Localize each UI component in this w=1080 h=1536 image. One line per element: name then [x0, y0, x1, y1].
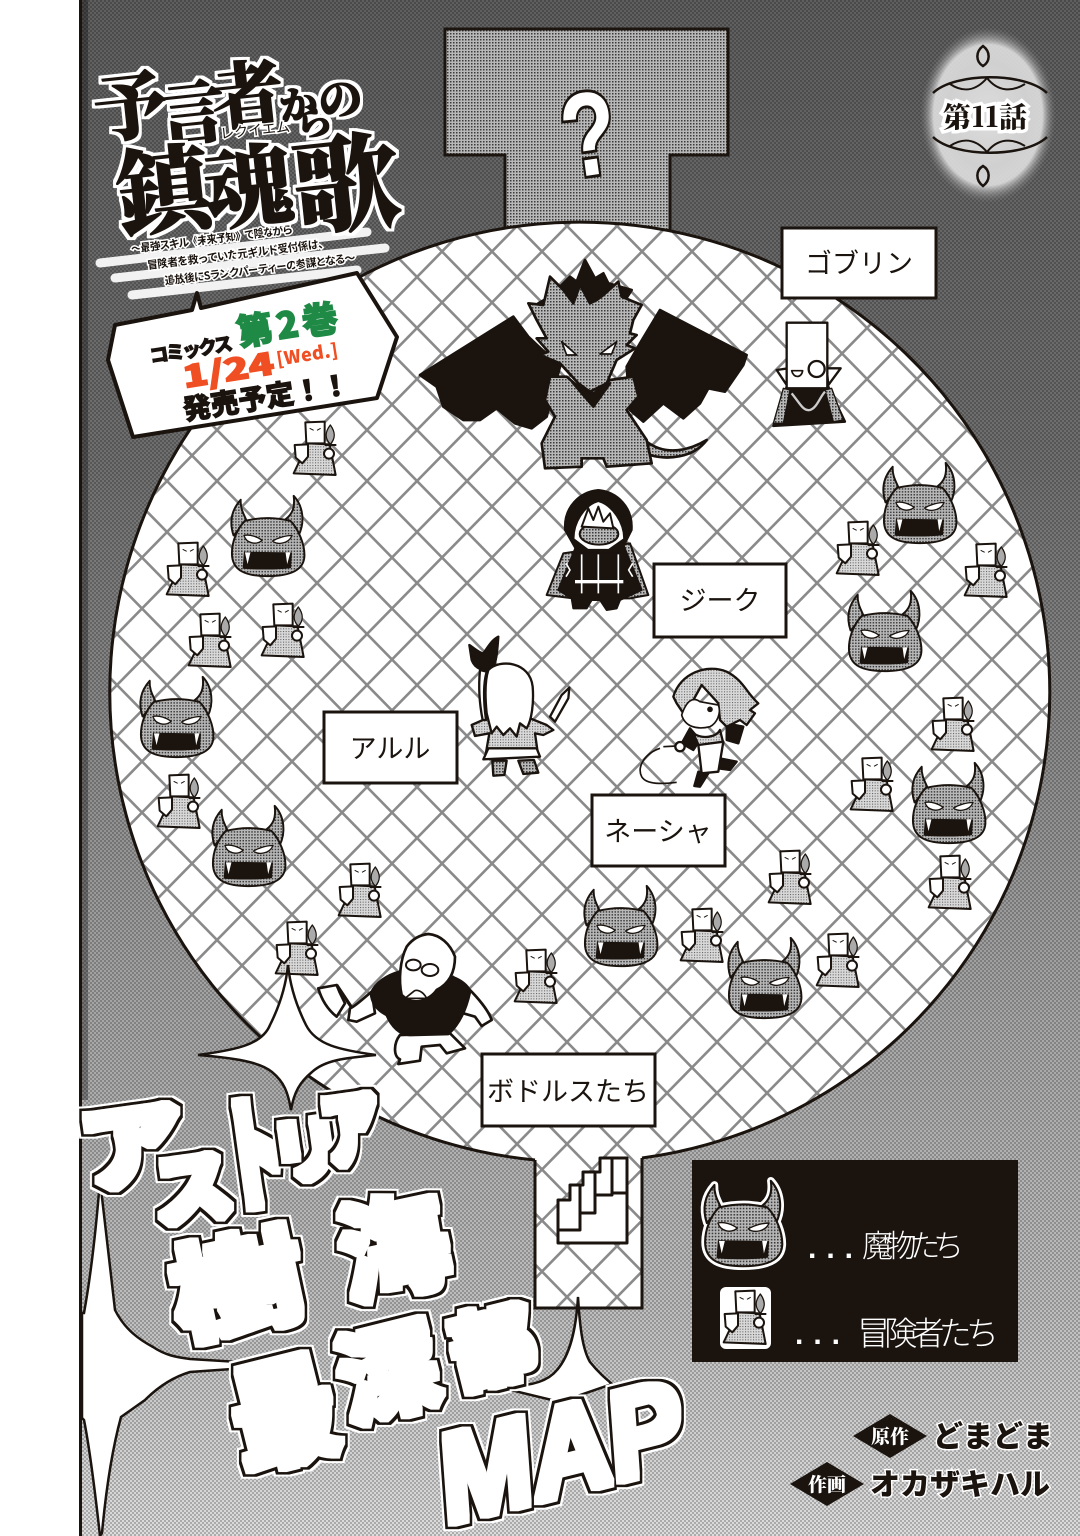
character: Zeke — [547, 490, 648, 610]
Aruru torso — [472, 718, 553, 758]
label: Bodorus party — [482, 1054, 655, 1126]
legend adventurer icon — [720, 1287, 771, 1349]
title row two — [154, 1153, 461, 1368]
callout text: コミックス — [147, 329, 235, 369]
dragon eyes — [562, 342, 617, 355]
title row two: 樹 — [154, 1188, 318, 1368]
goblin eye — [792, 371, 803, 376]
Zeke belt — [575, 580, 623, 583]
dragon body — [542, 377, 652, 468]
logo line one: 者 — [206, 35, 288, 145]
legend adventurer dots: ... — [795, 1318, 850, 1351]
Bodorus left arm — [348, 992, 375, 1022]
label: Aruru — [324, 712, 457, 783]
adventurer 11 — [276, 922, 318, 975]
legend adventurer name: 冒険者たち — [857, 1307, 999, 1355]
T-shaped upper room — [445, 29, 728, 240]
title row two: 海 — [323, 1153, 461, 1329]
logo subtitle bars — [100, 232, 385, 295]
adventurer 12 — [515, 950, 557, 1003]
logo line two: 魂 — [198, 115, 299, 249]
logo ruby text: レクイエム — [219, 118, 291, 142]
legend panel — [692, 1160, 1018, 1362]
adventurers — [158, 422, 1007, 1003]
Nesha whip — [640, 746, 677, 783]
monster 7 — [584, 886, 657, 966]
monster 1 — [231, 496, 304, 576]
dragon left wing — [420, 317, 560, 428]
logo line one: 言 — [152, 58, 230, 162]
badge ornaments — [933, 46, 1047, 186]
logo line one — [88, 35, 365, 162]
title row three — [211, 1273, 547, 1499]
sparkle: MAP — [490, 1297, 612, 1402]
credit: original story — [853, 1412, 1053, 1458]
big title: Astoria Sea of Trees deepest MAP — [70, 1051, 698, 1536]
label: Bodorus party: ボドルスたち — [487, 1077, 649, 1107]
callout: comics volume 2 — [108, 273, 397, 437]
legend monster icon — [704, 1181, 782, 1266]
logo subtitle text: 冒険者を救っていた元ギルド受付係は、 — [146, 235, 330, 273]
logo line two: 鎮 — [109, 111, 223, 256]
goblin collar — [773, 388, 843, 423]
Aruru skirt — [483, 748, 540, 759]
sparkle: top — [198, 965, 376, 1110]
monsters — [140, 463, 985, 1018]
label: Zeke — [654, 564, 786, 637]
logo line two — [109, 97, 407, 259]
character: Bodorus — [318, 934, 492, 1064]
circular dungeon floor with grid — [100, 210, 1060, 1320]
monster 4 — [140, 677, 213, 757]
title row three: 深 — [320, 1284, 452, 1448]
adventurer 1 — [294, 422, 336, 475]
adventurer 15 — [681, 909, 723, 962]
icon: question mark: ? — [553, 66, 625, 204]
badge text: 第11話 — [943, 96, 1027, 136]
dragon head — [528, 277, 642, 392]
label: Zeke: ジーク — [680, 586, 760, 616]
adventurer 13 — [769, 851, 811, 904]
series logo title — [88, 35, 407, 295]
character: goblin — [773, 323, 845, 426]
Zeke hood — [565, 490, 632, 553]
author name: どまどま — [933, 1412, 1053, 1456]
character: Nesha — [640, 669, 758, 787]
character: Aruru — [469, 637, 569, 776]
callout text: 1/24 — [179, 339, 277, 397]
Nesha face — [682, 699, 719, 728]
callout text: [Wed.] — [274, 336, 340, 372]
Nesha boots — [694, 758, 737, 787]
logo subtitle text — [130, 221, 356, 289]
adventurer 7 — [932, 698, 974, 751]
Zeke cape — [547, 543, 648, 598]
credit: artist: 作画 — [808, 1473, 846, 1496]
logo line one: 予 — [88, 45, 172, 159]
logo line two: 歌 — [285, 97, 407, 259]
title row one: リ — [264, 1091, 348, 1201]
Nesha arms — [682, 723, 743, 750]
callout text: 発売予定！！ — [180, 363, 352, 429]
legend monster name: 魔物たち — [862, 1221, 964, 1266]
Zeke hair — [582, 507, 613, 528]
legend monster dots: ... — [808, 1232, 863, 1265]
credit: artist — [790, 1460, 1050, 1506]
Aruru bow — [469, 637, 498, 670]
title row one: ト — [211, 1051, 297, 1241]
callout text — [147, 289, 352, 429]
credit: original story: 原作 — [871, 1425, 909, 1448]
adventurer 14 — [929, 856, 971, 909]
Aruru hair — [486, 664, 533, 737]
logo line one: か — [276, 73, 320, 131]
Aruru hair strand — [479, 670, 487, 720]
Zeke coat trim — [566, 553, 633, 593]
Nesha hair — [673, 669, 758, 727]
Bodorus right arm — [463, 988, 492, 1026]
title row three: 部 — [437, 1273, 547, 1411]
Bodorus glasses — [406, 960, 438, 976]
adventurer 8 — [851, 758, 893, 811]
Zeke lower face — [580, 523, 618, 545]
goblin monocle — [809, 361, 825, 377]
dragon chest mark — [573, 383, 610, 407]
Bodorus mouth — [405, 990, 427, 998]
Nesha eye — [708, 708, 712, 711]
goblin necklace — [792, 392, 825, 410]
label: Aruru: アルル — [350, 734, 430, 764]
title row one: ア — [70, 1067, 192, 1213]
dragon right wing — [627, 310, 747, 422]
dragon crest spikes — [538, 260, 632, 313]
Zeke face — [575, 503, 623, 548]
monster 6 — [212, 806, 285, 886]
title row three: 最 — [211, 1311, 353, 1499]
label: goblin — [782, 228, 936, 298]
logo subtitle text: ～最強スキル《未来予知》で陰ながら — [130, 221, 294, 257]
icon: stairs — [558, 1158, 627, 1243]
label: Nesha — [592, 795, 725, 866]
Nesha torso — [693, 730, 723, 748]
monster 8 — [728, 938, 801, 1018]
Nesha dress — [698, 742, 723, 773]
artist name: オカザキハル — [870, 1460, 1050, 1504]
monster 3 — [848, 591, 921, 671]
monster 2 — [883, 463, 956, 543]
adventurer 6 — [965, 544, 1007, 597]
adventurer 9 — [158, 775, 200, 828]
Zeke coat — [558, 545, 642, 610]
logo subtitle text: 追放後にSランクパーティーの参謀となる～ — [164, 249, 356, 289]
Bodorus shirt — [371, 972, 470, 1035]
episode badge — [920, 27, 1056, 203]
adventurer 3 — [189, 614, 231, 667]
goblin robe — [773, 387, 845, 426]
logo line one: ら — [293, 93, 335, 147]
Nesha hands — [675, 742, 685, 751]
Bodorus axe — [318, 985, 345, 1017]
adventurer 4 — [262, 604, 304, 657]
callout text: 第2巻 — [233, 289, 341, 357]
logo line one: の — [315, 62, 365, 130]
Aruru sword — [550, 688, 569, 722]
goblin ears — [777, 368, 841, 385]
dragon boss — [420, 260, 747, 468]
Aruru legs — [492, 760, 538, 776]
adventurer 10 — [339, 864, 381, 917]
monster 5 — [912, 763, 985, 843]
title row one: ス — [144, 1120, 240, 1246]
adventurer 2 — [167, 543, 209, 596]
goblin head — [787, 323, 827, 388]
title row one: ア — [314, 1061, 386, 1187]
Bodorus legs — [395, 1033, 465, 1064]
label: goblin: ゴブリン — [805, 249, 913, 279]
callout bubble — [108, 273, 397, 437]
sparkle: lower left — [82, 1180, 288, 1536]
adventurer 5 — [837, 522, 879, 575]
label: Nesha: ネーシャ — [604, 817, 712, 847]
Bodorus head — [400, 934, 455, 1001]
dragon tail — [647, 440, 707, 457]
title row one — [70, 1051, 386, 1246]
adventurer 16 — [817, 934, 859, 987]
